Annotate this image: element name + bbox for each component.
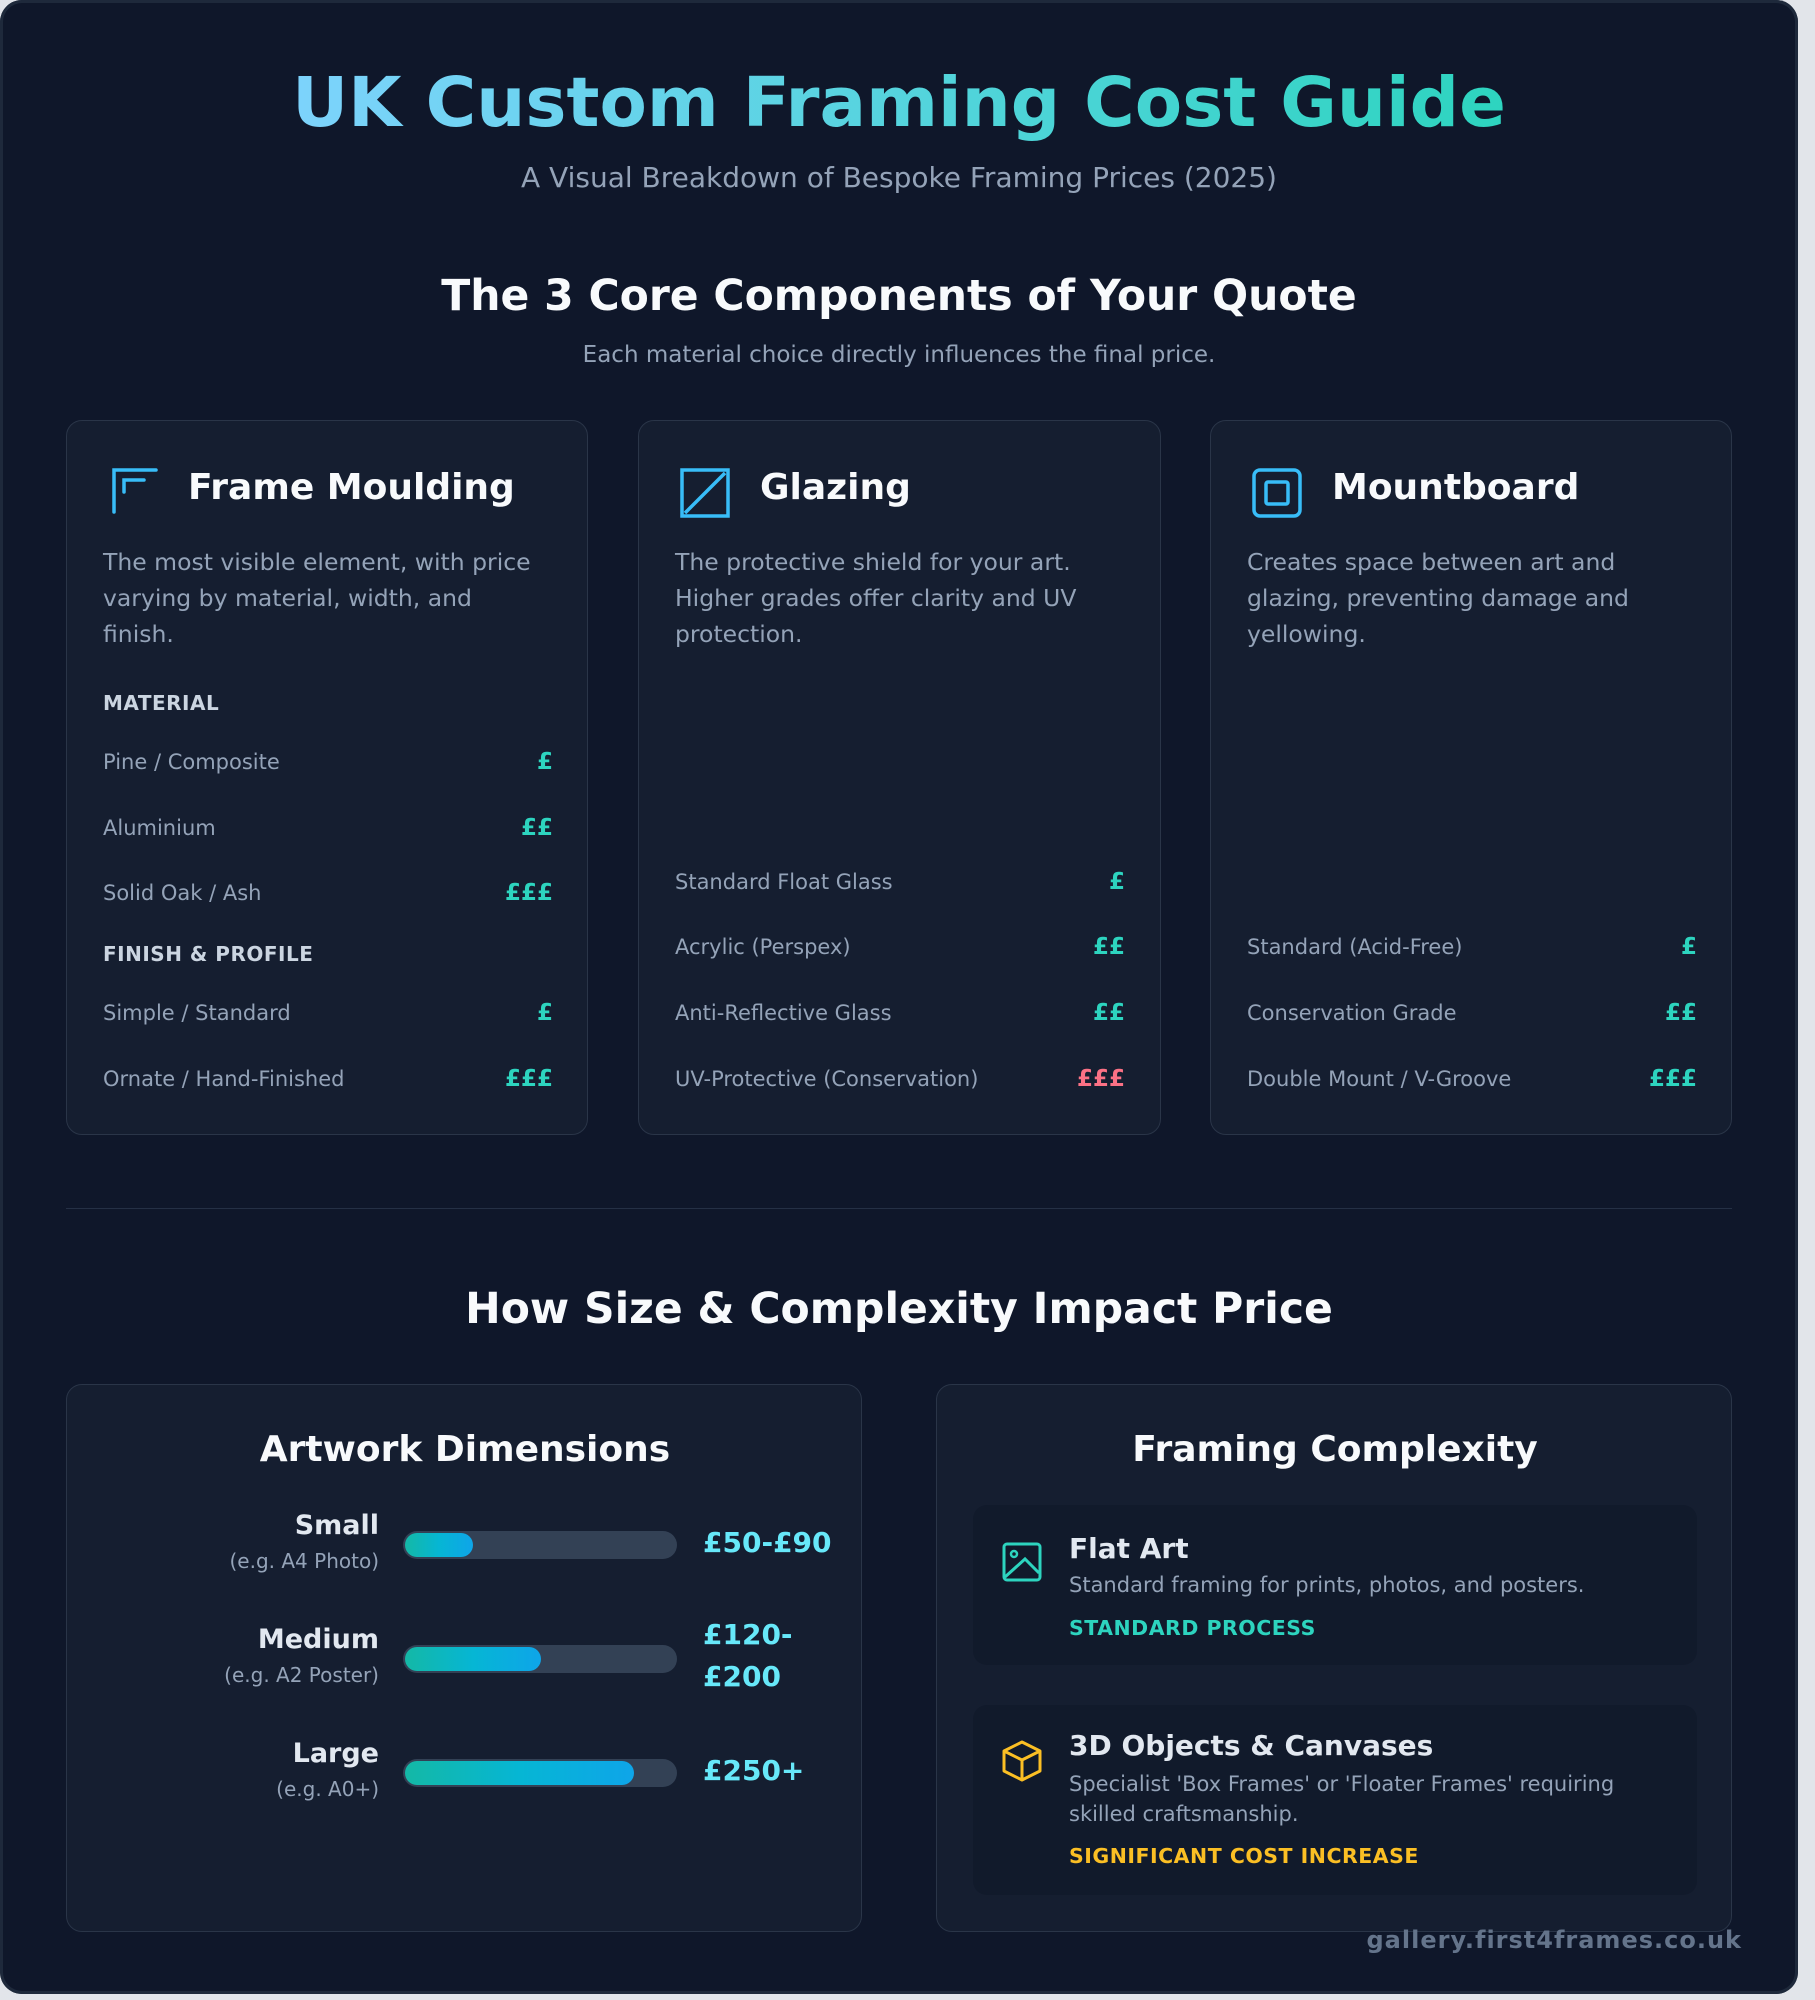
heading: Artwork Dimensions xyxy=(260,1429,670,1470)
price rows xyxy=(675,869,1125,1092)
price rows xyxy=(1247,934,1697,1092)
heading: Frame Moulding xyxy=(188,467,515,508)
price rows: £££ xyxy=(505,880,553,906)
size rows: (e.g. A2 Poster) xyxy=(224,1663,379,1687)
icon: mount xyxy=(1252,468,1302,518)
size rows: (e.g. A4 Photo) xyxy=(230,1549,379,1573)
panel: mountboard xyxy=(1210,420,1732,1135)
price rows: ££ xyxy=(1665,1000,1697,1026)
price rows: Solid Oak / Ash xyxy=(103,881,261,905)
heading: Framing Complexity xyxy=(1132,1429,1538,1470)
panel: artwork dimensions xyxy=(66,1384,862,1932)
label: material: MATERIAL xyxy=(103,691,219,715)
size rows: £250+ xyxy=(703,1754,804,1787)
footer credit: gallery.first4frames.co.uk xyxy=(1366,1926,1742,1954)
price rows: £ xyxy=(1681,934,1697,960)
price rows: Double Mount / V-Groove xyxy=(1247,1067,1511,1091)
item: flat art: STANDARD PROCESS xyxy=(1069,1616,1316,1640)
size rows: £120- xyxy=(703,1618,793,1651)
item: flat art: Standard framing for prints, photos, and posters. xyxy=(1069,1573,1584,1597)
price rows: Conservation Grade xyxy=(1247,1001,1457,1025)
panel: framing complexity xyxy=(936,1384,1732,1932)
panel: glazing xyxy=(638,420,1161,1135)
price rows: ££ xyxy=(1093,934,1125,960)
size rows: (e.g. A0+) xyxy=(276,1777,379,1801)
price rows: £££ xyxy=(1077,1066,1125,1092)
price rows: Standard (Acid-Free) xyxy=(1247,935,1462,959)
price rows: ££ xyxy=(521,815,553,841)
description: The most visible element, with price varying by material, width, and finish. xyxy=(103,548,531,648)
heading: Glazing xyxy=(760,467,911,508)
size rows: Medium xyxy=(258,1624,379,1655)
price rows: UV-Protective (Conservation) xyxy=(675,1067,978,1091)
icon: picture xyxy=(1002,1542,1042,1582)
item: flat art: Flat Art xyxy=(1069,1532,1189,1565)
price rows: £££ xyxy=(505,1066,553,1092)
price rows: Anti-Reflective Glass xyxy=(675,1001,892,1025)
price rows: Simple / Standard xyxy=(103,1001,291,1025)
price rows: £ xyxy=(537,1000,553,1026)
size rows: £50-£90 xyxy=(703,1526,832,1559)
price rows: Aluminium xyxy=(103,816,216,840)
price rows: Ornate / Hand-Finished xyxy=(103,1067,344,1091)
description: The protective shield for your art. Higher grades offer clarity and UV protection. xyxy=(675,548,1076,648)
subtitle: A Visual Breakdown of Bespoke Framing Prices (2025) xyxy=(521,161,1277,194)
icon: box xyxy=(1002,1740,1042,1782)
icon: glass pane xyxy=(680,468,730,518)
size rows: Large xyxy=(293,1738,379,1769)
section subheading: Each material choice directly influences the final price. xyxy=(583,342,1215,368)
section heading: size & complexity: How Size & Complexity Impact Price xyxy=(465,1285,1333,1334)
item: 3d objects: Specialist 'Box Frames' or 'Floater Frames' requiring skilled craftsmanship. xyxy=(1069,1772,1614,1826)
size rows xyxy=(224,1510,832,1801)
price rows: Standard Float Glass xyxy=(675,870,893,894)
price rows: £ xyxy=(537,749,553,775)
item: 3d objects: 3D Objects & Canvases xyxy=(1069,1729,1433,1762)
heading: Mountboard xyxy=(1332,467,1579,508)
description: Creates space between art and glazing, preventing damage and yellowing. xyxy=(1247,548,1629,648)
price rows: ££ xyxy=(1093,1000,1125,1026)
price rows: £ xyxy=(1109,869,1125,895)
size rows: £200 xyxy=(703,1660,781,1693)
price rows: Acrylic (Perspex) xyxy=(675,935,851,959)
section heading: core components: The 3 Core Components of Your Quote xyxy=(441,272,1357,321)
item: 3d objects: SIGNIFICANT COST INCREASE xyxy=(1069,1844,1419,1868)
price rows xyxy=(103,749,553,1092)
panel: frame moulding xyxy=(66,420,588,1135)
icon: frame corner xyxy=(112,468,158,514)
price rows: £££ xyxy=(1649,1066,1697,1092)
price rows: FINISH & PROFILE xyxy=(103,942,313,966)
size rows: Small xyxy=(295,1510,379,1541)
item: flat art xyxy=(973,1505,1697,1665)
price rows: Pine / Composite xyxy=(103,750,280,774)
item: 3d objects xyxy=(973,1705,1697,1895)
title: UK Custom Framing Cost Guide xyxy=(292,63,1506,143)
